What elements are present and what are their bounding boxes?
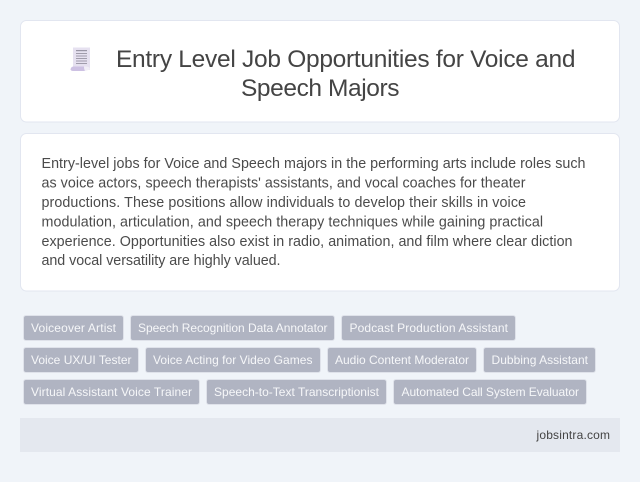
tag: Voice UX/UI Tester	[24, 348, 138, 372]
title: Speech Majors	[241, 75, 400, 102]
text block: description	[42, 156, 586, 269]
text block: description: productions. These positions allow individuals to develop their skills in voice	[42, 195, 526, 211]
footer bar	[20, 418, 620, 452]
tag: Virtual Assistant Voice Trainer: Virtual Assistant Voice Trainer	[31, 385, 192, 399]
tag: Dubbing Assistant	[484, 348, 596, 372]
tag: Podcast Production Assistant	[342, 316, 516, 340]
title	[116, 46, 576, 102]
tag: Dubbing Assistant: Dubbing Assistant	[492, 353, 589, 367]
tag: Speech-to-Text Transcriptionist	[206, 380, 386, 404]
tag: Voice UX/UI Tester: Voice UX/UI Tester	[31, 353, 132, 367]
text block: description: modulation, articulation, and speech therapy techniques while gaining practical	[42, 214, 543, 230]
tag: Automated Call System Evaluator: Automated Call System Evaluator	[402, 385, 579, 399]
panel: description card	[20, 134, 620, 291]
tag: Voice Acting for Video Games: Voice Acting for Video Games	[153, 353, 312, 367]
tag: Speech-to-Text Transcriptionist: Speech-to-Text Transcriptionist	[214, 385, 380, 399]
tag: Speech Recognition Data Annotator	[130, 316, 334, 340]
tag: Speech Recognition Data Annotator: Speech Recognition Data Annotator	[138, 321, 328, 335]
text block: description: as voice actors, speech therapists' assistants, and vocal coaches for theater	[42, 176, 526, 192]
footer source text: jobsintra.com	[536, 428, 610, 442]
tag list	[24, 316, 596, 404]
panel: title card	[20, 20, 620, 122]
text block: description: experience. Opportunities also exist in radio, animation, and film where clear diction	[42, 234, 573, 250]
tag: Automated Call System Evaluator	[394, 380, 586, 404]
tag: Voice Acting for Video Games	[146, 348, 320, 372]
tag: Virtual Assistant Voice Trainer	[24, 380, 200, 404]
tag: Audio Content Moderator: Audio Content Moderator	[335, 353, 469, 367]
text block: description: and vocal versatility are highly valued.	[42, 253, 280, 269]
text block: description: Entry-level jobs for Voice and Speech majors in the performing arts include roles such	[42, 156, 586, 172]
tag: Voiceover Artist	[24, 316, 124, 340]
tag: Audio Content Moderator	[328, 348, 476, 372]
tag: Voiceover Artist: Voiceover Artist	[31, 321, 117, 335]
tag: Podcast Production Assistant: Podcast Production Assistant	[350, 321, 509, 335]
icon: paper scroll document	[70, 48, 90, 71]
title: Entry Level Job Opportunities for Voice and	[116, 46, 576, 73]
